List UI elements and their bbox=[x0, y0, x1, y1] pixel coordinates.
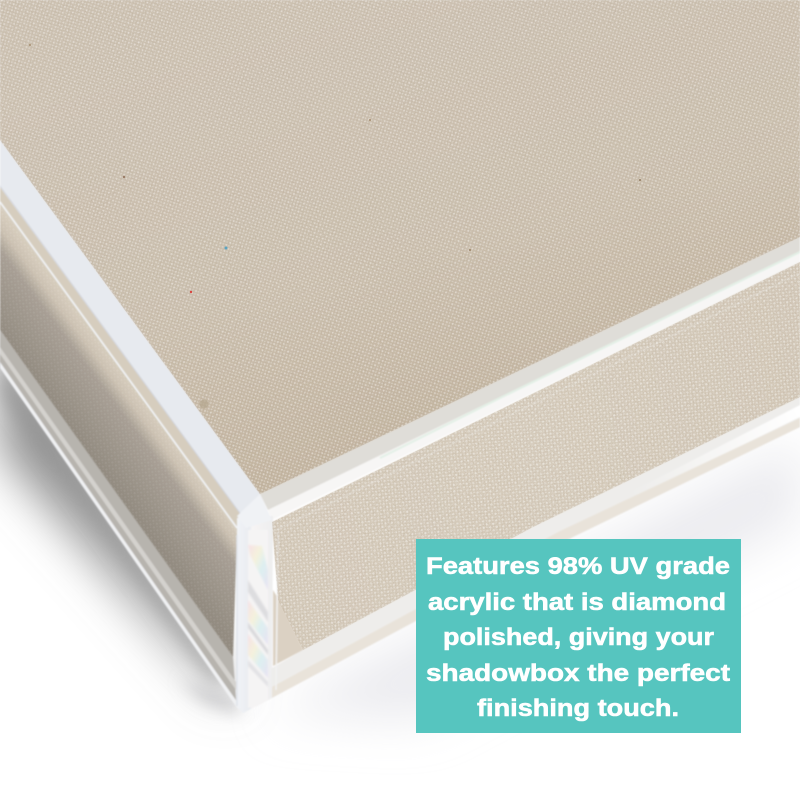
callout panel bbox=[416, 539, 741, 733]
acrylic top edge right bbox=[260, 237, 800, 532]
canvas front side bbox=[272, 262, 800, 650]
acrylic base on left side bbox=[0, 330, 240, 712]
floor shadow bbox=[0, 330, 800, 720]
callout text: finishing touch. bbox=[477, 695, 679, 722]
acrylic top edge left bbox=[0, 140, 260, 533]
acrylic corner post bbox=[237, 494, 278, 713]
fabric fold bbox=[273, 590, 303, 666]
fabric specks bbox=[29, 44, 641, 408]
canvas top surface bbox=[0, 0, 800, 494]
callout text bbox=[426, 553, 730, 722]
callout text: acrylic that is diamond bbox=[428, 589, 726, 616]
acrylic base on front side bbox=[268, 397, 800, 700]
callout text: shadowbox the perfect bbox=[426, 660, 730, 687]
canvas left side in shadow bbox=[0, 207, 237, 657]
prism reflections bbox=[248, 545, 268, 687]
callout text: Features 98% UV grade bbox=[426, 553, 730, 580]
callout text: polished, giving your bbox=[443, 624, 714, 651]
